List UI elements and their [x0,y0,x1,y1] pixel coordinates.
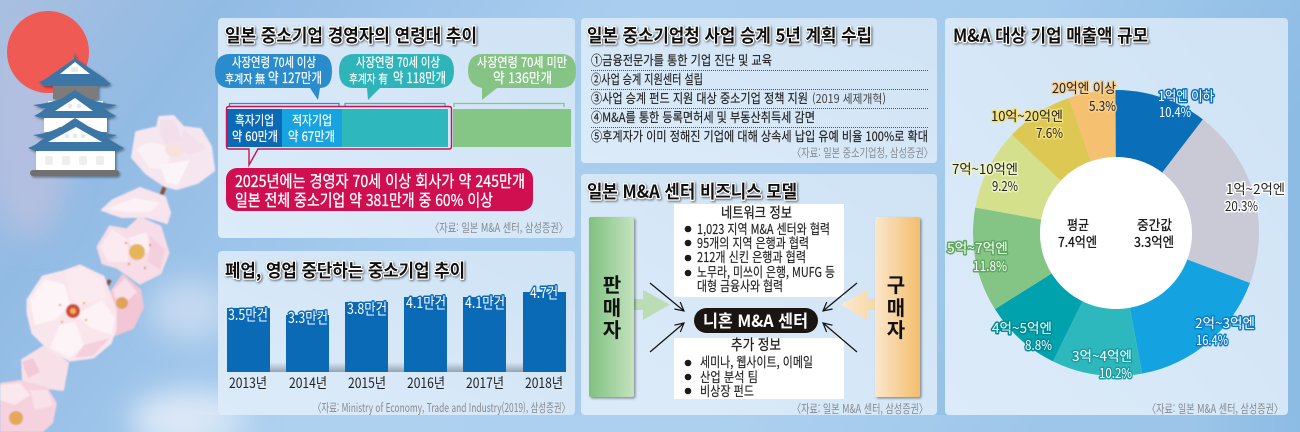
bar chart: 4.7건 [530,282,558,303]
stacked bar: 약 60만개 [232,126,278,145]
bar chart: 2015년 [348,373,386,393]
source note: 〈자료: Ministry of Economy, Trade and Industry(2019), 삼성증권〉 [313,399,570,416]
slice labels: 9.2% [992,175,1018,195]
slice labels: 10억~20억엔 [991,105,1063,125]
icon: japanese castle [28,52,124,176]
panel: closures bar chart [218,251,575,416]
buyer box [875,217,920,397]
brackets above bar [230,104,564,107]
seller box: 판 [603,269,621,298]
slice labels: 1억엔 이하 [1158,85,1215,105]
bar chart: 2018년 [525,373,563,393]
additional info box: 세미나, 웹사이트, 이메일 [700,351,813,371]
source note: 〈자료: 일본 M&A 센터, 삼성증권〉 [430,219,568,236]
additional info box: 산업 분석 팀 [700,366,758,386]
heading: 일본 M&A 센터 비즈니스 모델 [587,178,797,204]
callout: 2025 projection: 일본 전체 중소기업 약 381만개 중 60% 이상 [235,187,493,211]
heading: 일본 중소기업청 사업 승계 5년 계획 수립 [587,22,872,48]
additional info box: 비상장 펀드 [700,380,754,400]
additional info box: 추가 정보 [731,334,781,355]
source note: 〈자료: 일본 중소기업청, 삼성증권〉 [792,144,933,161]
icon: red sun [7,11,89,93]
plan list: ②사업 승계 지원센터 설립 [591,69,703,88]
flower third [98,218,168,283]
slice labels: 1억~2억엔 [1226,178,1285,198]
slice labels: 10.4% [1159,101,1191,121]
network info box: 95개의 지역 은행과 협력 [697,232,809,252]
callout: 2025 projection [226,168,533,211]
bar chart: 4.1만건 [465,292,505,313]
network info box: 212개 신킨 은행과 협력 [697,246,806,266]
heading: 폐업, 영업 중단하는 중소기업 추이 [225,257,465,283]
slice labels: 5억~7억엔 [947,237,1008,257]
bar chart: 3.8만건 [347,298,387,319]
slice labels: 20억엔 이상 [1052,77,1116,97]
bar chart: 2017년 [466,373,504,393]
center labels [1058,214,1174,251]
bar chart: 3.5만건 [228,304,268,325]
flower second [102,188,170,223]
slice labels: 2억~3억엔 [1195,312,1255,332]
slice labels [947,77,1285,382]
flower bottom [0,380,57,432]
bar chart [227,282,566,393]
slice labels: 3억~4억엔 [1072,345,1132,365]
panel: M&A center business model [581,174,937,417]
callout: 70+ with successor [339,52,454,100]
panel: five-year succession plan [581,18,937,163]
callout: under 70: 사장연령 70세 미만 [477,52,567,71]
center labels: 중간값 [1137,214,1172,234]
thin arrows toward center [650,283,857,352]
seller box: 자 [603,314,621,343]
bar chart: 2013년 [229,373,267,393]
callout: 70+ no successor [215,52,332,100]
callout: 70+ no successor: 사장연령 70세 이상 [232,52,316,71]
slice labels: 4억~5억엔 [992,317,1052,337]
red highlight outline [226,106,452,165]
buyer box: 매 [887,292,905,321]
slice labels: 5.3% [1089,95,1116,115]
source note: 〈자료: 일본 M&A 센터, 삼성증권〉 [792,400,928,417]
flower right small [110,275,143,335]
additional info box [674,334,844,400]
heading: 일본 중소기업 경영자의 연령대 추이 [225,22,477,48]
flower bud [22,347,68,390]
bar chart: 2016년 [407,373,445,393]
bar chart: 4.1만건 [406,292,446,313]
plan list: ⑤후계자가 이미 정해진 기업에 대해 상속세 납입 유예 비율 100%로 확대 [591,126,928,145]
callout: 70+ no successor: 약 127만개 [268,68,322,88]
panel: revenue donut chart [945,18,1288,417]
slice labels: 8.8% [1025,334,1052,354]
stacked bar: 약 67만개 [288,126,335,145]
stacked bar: 적자기업 [292,110,332,129]
seller box [589,217,634,397]
callout: 70+ no successor: 후계자 無 [225,70,265,87]
plan list: ①금융전문가를 통한 기업 진단 및 교육 [591,50,772,69]
panel: age distribution of SME managers [215,18,576,238]
slice labels: 20.3% [1225,195,1258,215]
callout: under 70: 약 136만개 [493,68,552,88]
decoration: cherry blossom branch [0,117,213,432]
plan list: ③사업 승계 펀드 지원 대상 중소기업 정책 지원 [591,88,808,107]
callout: under 70 [468,52,576,100]
network info box: 1,023 지역 M&A 센터와 협력 [697,218,830,238]
stacked bar: 흑자기업 [235,110,274,129]
seller box: 매 [603,292,621,321]
buyer box: 자 [887,314,905,343]
flower big [28,266,115,360]
donut center hole [1040,157,1192,309]
plan list [591,50,928,145]
slice labels: 7.6% [1036,122,1063,142]
plan list: ④M&A를 통한 등록면허세 및 부동산취득세 감면 [591,107,815,126]
donut chart [1006,124,1226,342]
stacked bar [227,109,571,147]
slice labels: 16.4% [1196,329,1228,349]
callout: 70+ with successor: 약 118만개 [393,68,446,88]
callout: 70+ with successor: 후계자 有 [349,70,388,87]
bar chart: 2014년 [289,373,327,393]
center labels: 7.4억엔 [1058,231,1097,251]
center labels: 3.3억엔 [1134,231,1174,251]
center labels: 평균 [1067,214,1089,234]
callout: 2025 projection: 2025년에는 경영자 70세 이상 회사가 약 245만개 [235,168,525,192]
slice labels: 10.2% [1099,362,1132,382]
bar chart: 3.3만건 [288,307,328,328]
center pill: 니혼 M&A 센터 [703,307,808,332]
buyer box: 구 [887,269,905,298]
heading: M&A 대상 기업 매출액 규모 [953,22,1148,48]
network info box: 대형 금융사와 협력 [697,275,783,295]
slice labels: 11.8% [973,255,1007,275]
slice labels: 7억~10억엔 [952,158,1018,178]
network info box: 네트워크 정보 [721,202,792,223]
plan list: (2019 세제개혁) [812,90,886,107]
flower top [133,117,213,188]
callout: 70+ with successor: 사장연령 70세 이상 [356,52,440,71]
arrow: seller to center [634,290,670,320]
network info box: 노무라, 미쓰이 은행, MUFG 등 [697,261,835,281]
network info box [674,202,844,297]
arrow: buyer to center [841,290,875,320]
